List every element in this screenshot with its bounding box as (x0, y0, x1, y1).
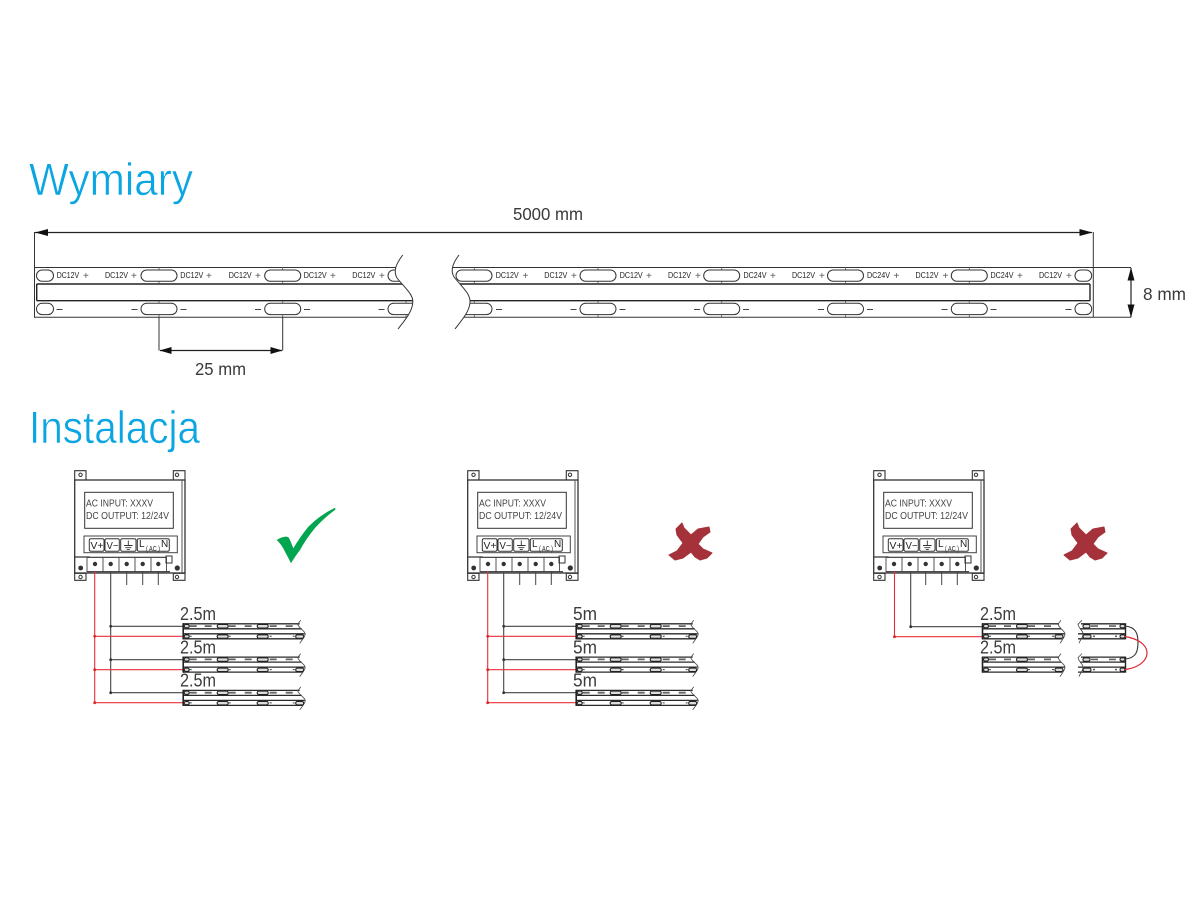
power supply: DC OUTPUT: 12/24V (479, 510, 562, 522)
power supply (468, 471, 578, 585)
wiring (93, 571, 183, 704)
LED strip: left section (34, 255, 424, 329)
LED strips 2.5m (980, 604, 1126, 677)
LED strip: right section: + (646, 271, 652, 282)
LED strip: right section: DC12V (544, 271, 568, 280)
dimension: total length 5000 mm: 5000 mm (513, 204, 583, 224)
series jumper wires (1125, 626, 1147, 670)
LED strip: right section: DC24V (990, 271, 1014, 280)
LED strip: right section: + (522, 271, 528, 282)
LED strip: left section: DC12V (180, 271, 204, 280)
icon: red cross, panel 2 (669, 523, 712, 560)
LED strips 2.5m (180, 604, 305, 710)
heading: Instalacja: Instalacja (29, 402, 201, 453)
LED strips 2.5m: 2.5m (180, 637, 216, 657)
LED strips 2.5m: 2.5m (180, 671, 216, 691)
power supply: AC INPUT: XXXV (86, 498, 153, 510)
LED strips 2.5m: 2.5m (180, 604, 216, 624)
power supply (75, 471, 185, 585)
power supply: ( AC ) (146, 546, 160, 553)
LED strips 2.5m: 2.5m (980, 604, 1016, 624)
LED strip: right section: DC12V (916, 271, 939, 280)
power supply: V+ (90, 541, 104, 552)
LED strip: left section: + (255, 271, 261, 282)
LED strip: right section: + (819, 271, 825, 282)
LED strip: right section: DC12V (1039, 271, 1062, 280)
LED strip: right section: DC12V (668, 271, 691, 280)
LED strip: left section: + (206, 271, 212, 282)
LED strip: left section: DC12V (105, 271, 128, 280)
LED strip: left section: + (83, 271, 89, 282)
power supply: AC INPUT: XXXV (885, 498, 952, 510)
LED strip: right section: + (894, 271, 900, 282)
LED strip: right section (440, 255, 1093, 329)
LED strip: right section: DC12V (496, 271, 519, 280)
power supply: AC INPUT: XXXV (479, 498, 546, 510)
LED strip: left section: + (379, 271, 385, 282)
LED strip: right section: DC24V (867, 271, 890, 280)
power supply: ( AC ) (945, 546, 959, 553)
LED strips 5m (573, 604, 698, 710)
dimension: pitch 25 mm: 25 mm (195, 359, 246, 379)
icon: red cross, panel 3 (1064, 523, 1107, 560)
panel: wrong installation, series connection (874, 471, 1147, 677)
icon: green check mark (277, 508, 336, 563)
wiring to strip (893, 571, 982, 638)
power supply: V+ (484, 541, 497, 552)
LED strips 2.5m: 2.5m (980, 637, 1016, 657)
power supply: V+ (890, 541, 903, 552)
power supply: V− (906, 541, 918, 552)
power supply: L (532, 539, 538, 550)
power supply: N (161, 539, 168, 550)
LED strip: right section: + (770, 271, 776, 282)
LED strip: right section: + (942, 271, 948, 282)
LED strips 5m: 5m (573, 637, 597, 657)
power supply: ( AC ) (539, 546, 553, 553)
LED strip: right section: + (1017, 271, 1023, 282)
dimension: total length 5000 mm (34, 204, 1093, 317)
LED strip: left section: DC12V (57, 271, 80, 280)
dimension: width 8 mm (1093, 268, 1186, 318)
power supply: L (139, 539, 145, 550)
LED strips 5m: 5m (573, 604, 597, 624)
LED strip: right section: DC24V (744, 271, 767, 280)
LED strips 5m: 5m (573, 671, 597, 691)
LED strip: left section: + (330, 271, 336, 282)
power supply: V− (500, 541, 512, 552)
power supply: V− (106, 541, 119, 552)
dimension: width 8 mm: 8 mm (1143, 284, 1186, 304)
LED strip: right section: DC12V (792, 271, 815, 280)
power supply: N (960, 539, 967, 550)
LED strip: right section: + (1066, 271, 1072, 282)
LED strip: left section: + (131, 271, 137, 282)
heading: Wymiary: Wymiary (29, 154, 193, 205)
wiring (486, 571, 576, 704)
LED strip: right section: + (571, 271, 577, 282)
LED strip: left section: DC12V (352, 271, 376, 280)
LED strip: right section: + (695, 271, 701, 282)
panel: wrong installation, 5m strips (468, 471, 698, 710)
power supply: L (938, 539, 944, 550)
LED strip: right section: DC12V (620, 271, 643, 280)
LED strip: left section: DC12V (304, 271, 327, 280)
power supply: DC OUTPUT: 12/24V (885, 510, 968, 522)
LED strip: left section: DC12V (229, 271, 252, 280)
panel: correct installation (75, 471, 335, 710)
power supply: DC OUTPUT: 12/24V (86, 510, 169, 522)
dimension: pitch 25 mm (159, 317, 283, 379)
power supply: N (554, 539, 561, 550)
power supply (874, 471, 984, 585)
